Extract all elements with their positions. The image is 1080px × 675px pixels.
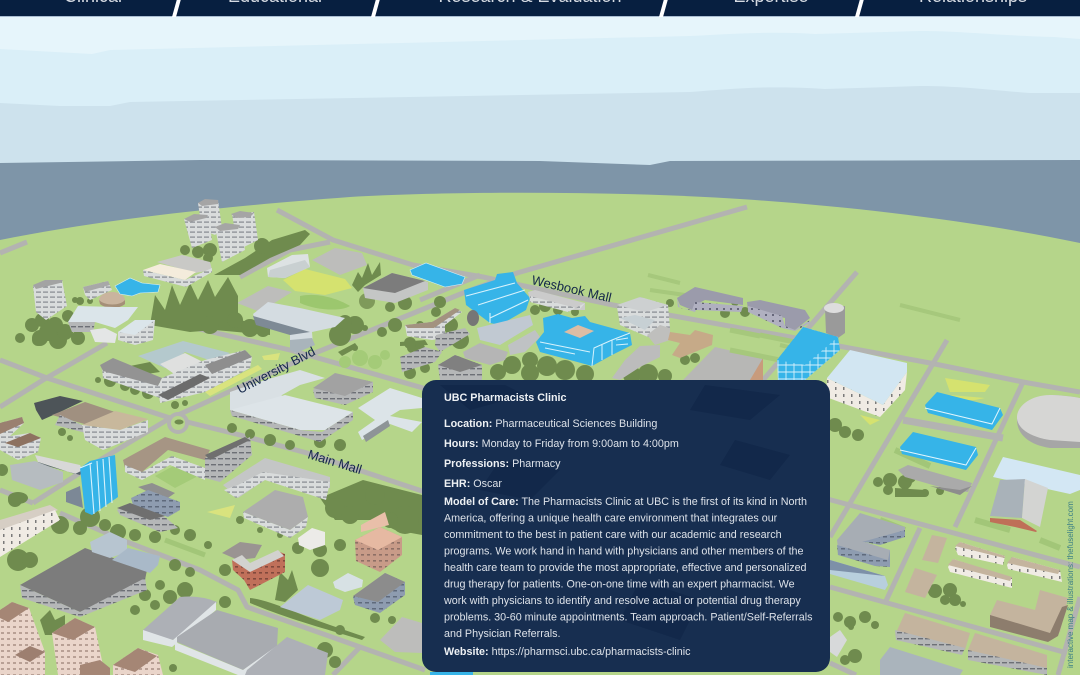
clinic details [444, 418, 679, 490]
pale flat block [993, 457, 1080, 494]
central campus [400, 263, 907, 417]
tan block [405, 308, 462, 340]
blue block south [900, 432, 978, 470]
label: University Blvd: University Blvd [234, 344, 318, 397]
long white hall [253, 302, 345, 353]
red-brown edge block [0, 417, 41, 460]
sky bands [0, 0, 1080, 175]
dark roof hall [363, 273, 428, 303]
lavender blocks [677, 287, 810, 331]
stacked blue-grey block [117, 483, 180, 532]
label: Main Mall: Main Mall [306, 447, 364, 477]
grey west blocks [10, 455, 83, 490]
pink towers [0, 602, 163, 675]
blue block [925, 392, 1003, 430]
tan L residence [990, 590, 1068, 642]
mid grey block [353, 573, 405, 613]
large dark hall [20, 548, 147, 617]
small block pale [333, 573, 363, 592]
grey residence [880, 647, 963, 675]
clinic details: EHR: Oscar [444, 478, 502, 490]
model of care text: and Physician Referrals. [444, 628, 561, 640]
clinic details: Professions: Pharmacy [444, 458, 561, 470]
pale hall [826, 350, 907, 417]
white lower hall [230, 370, 353, 442]
building group: north-west towers and blocks [0, 199, 1080, 675]
tan L block [123, 437, 252, 482]
credit line: interactive map & illustrations: thefuselight.com [1066, 501, 1075, 668]
blue tower [66, 455, 118, 515]
white curved block [267, 254, 310, 278]
model of care text: commitment to the best in patient care with our academic and research [444, 529, 782, 541]
faint map silhouettes [440, 385, 790, 640]
west cluster [34, 396, 148, 450]
model of care text [443, 496, 812, 640]
clinic details: Hours: Monday to Friday from 9:00am to 4:00pm [444, 438, 679, 450]
pink blocks [355, 512, 402, 572]
tan cross block [668, 330, 713, 358]
red block [222, 542, 285, 590]
grey block [313, 373, 373, 405]
white H block [358, 388, 422, 442]
residential towers [184, 199, 258, 262]
white L block [223, 458, 330, 500]
panel: UBC Pharmacists Clinic info [422, 380, 830, 672]
land [0, 193, 1080, 675]
grey block south [243, 490, 308, 538]
blue tower east [777, 327, 840, 380]
trees [0, 230, 966, 672]
pale blue-grey stack [617, 297, 670, 337]
long white west hall [0, 505, 60, 557]
tan lots [905, 535, 947, 598]
label: Wesbook Mall: Wesbook Mall [530, 272, 613, 305]
row houses [948, 542, 1062, 588]
road labels [234, 272, 613, 477]
clinic details: Location: Pharmaceutical Sciences Building [444, 418, 657, 430]
blue building pharmaceutical sciences [536, 314, 632, 366]
roundabout [167, 412, 189, 434]
grey L residence [837, 513, 905, 567]
round arena [1017, 395, 1080, 448]
model of care text: health care team to provide the most appropriate, effective and personalized [444, 562, 807, 574]
website: Website: https://pharmsci.ubc.ca/pharmacists-clinic [444, 646, 691, 658]
blue building [115, 278, 160, 296]
grey long block [528, 290, 585, 312]
small white block [298, 528, 325, 550]
grass patches and yellow lawns [155, 248, 1060, 653]
round tower [824, 303, 845, 338]
grey clustered blocks [400, 310, 540, 380]
cream building [143, 255, 212, 287]
top navigation bar [0, 0, 1080, 17]
gabled block [990, 479, 1048, 532]
model of care text: problems. 30-60 minute appointments. Team approach. Patient/Self-Referrals [444, 612, 812, 624]
blue building chemistry [464, 272, 530, 325]
model of care text: drug therapy for patients. One-on-one time with an expert pharmacist. We [444, 578, 795, 590]
curved hall trio [143, 597, 328, 675]
small white block east [830, 630, 847, 657]
water [0, 160, 1080, 300]
east campus [430, 392, 1080, 675]
model of care text: America, offering a unique health care environment that integrates our [444, 512, 778, 524]
grey long block [898, 465, 972, 495]
small blocks [83, 281, 112, 300]
pale blue residence [830, 560, 888, 590]
model of care text: work with physicians to identify and resolve actual or potential drug therapy [443, 595, 801, 607]
blue strip at panel base [430, 672, 473, 675]
panel heading: UBC Pharmacists Clinic [444, 392, 566, 404]
model of care text: Model of Care: The Pharmacists Clinic at UBC is the first of its kind in North [444, 496, 807, 508]
tan residences [895, 613, 1047, 675]
tall block [33, 280, 67, 320]
blue building north [410, 263, 465, 287]
white complex [68, 306, 155, 345]
model of care text: programs. We work hand in hand with physicians and other members of the [444, 546, 804, 558]
flat blue-grey block [280, 585, 343, 620]
grey block mid [612, 345, 660, 380]
blue-grey pair [90, 532, 160, 573]
road network [0, 207, 1080, 675]
courtyard complex [100, 341, 252, 403]
